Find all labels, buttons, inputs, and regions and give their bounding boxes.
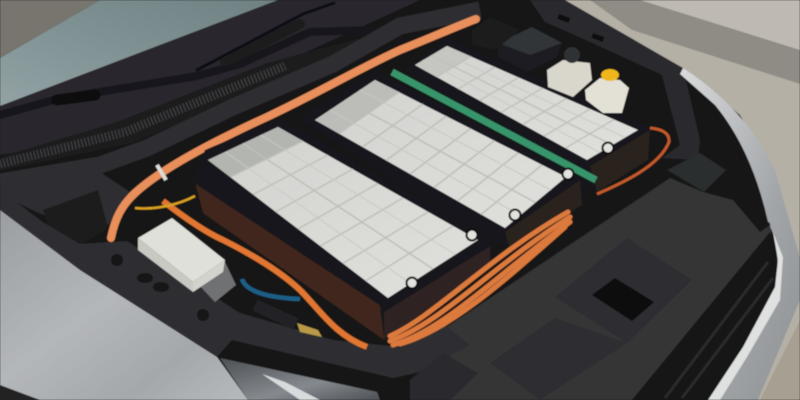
wipers (0, 3, 372, 115)
cable: orange left (163, 201, 367, 347)
bumper trim (708, 232, 783, 400)
ground: pavement at right (560, 0, 800, 400)
cable: yellow small (135, 196, 195, 208)
recess panel (555, 238, 692, 343)
battery module: rear (403, 38, 652, 192)
gold component (297, 323, 322, 337)
black connector (472, 17, 520, 50)
battery module: front (193, 118, 492, 340)
headlight (220, 358, 380, 400)
support beam above fender (0, 190, 470, 378)
silver body strip right (680, 68, 800, 400)
front panel: black shroud (412, 178, 772, 400)
hatch opening (592, 278, 654, 321)
windshield (0, 0, 278, 106)
rubber seal along cowl (0, 10, 480, 182)
terminals: white studs (406, 142, 614, 288)
grille (632, 232, 776, 400)
battery module: middle (298, 70, 585, 250)
fender: silver left body (0, 210, 248, 400)
cable: blue hose (242, 279, 300, 299)
cable: orange right (597, 128, 669, 194)
black hose (255, 305, 296, 324)
cowl vent (0, 38, 365, 171)
reservoir: white with yellow cap (585, 69, 629, 113)
reservoir: white with black cap (547, 47, 592, 97)
left cowl plate (0, 172, 130, 225)
lower block (410, 353, 478, 400)
scuttle panel below windshield (0, 0, 420, 155)
silver foil components (196, 262, 236, 302)
main orange cable (111, 19, 476, 238)
green busbar (392, 72, 596, 180)
black control box (498, 27, 562, 72)
black cylinder component (43, 190, 108, 248)
wheel arch corner (0, 385, 40, 400)
hood frame right (530, 0, 726, 192)
white junction box (138, 218, 225, 292)
cable tie (157, 165, 166, 180)
roof panel (0, 0, 100, 58)
cable bundle: orange front (390, 212, 570, 345)
